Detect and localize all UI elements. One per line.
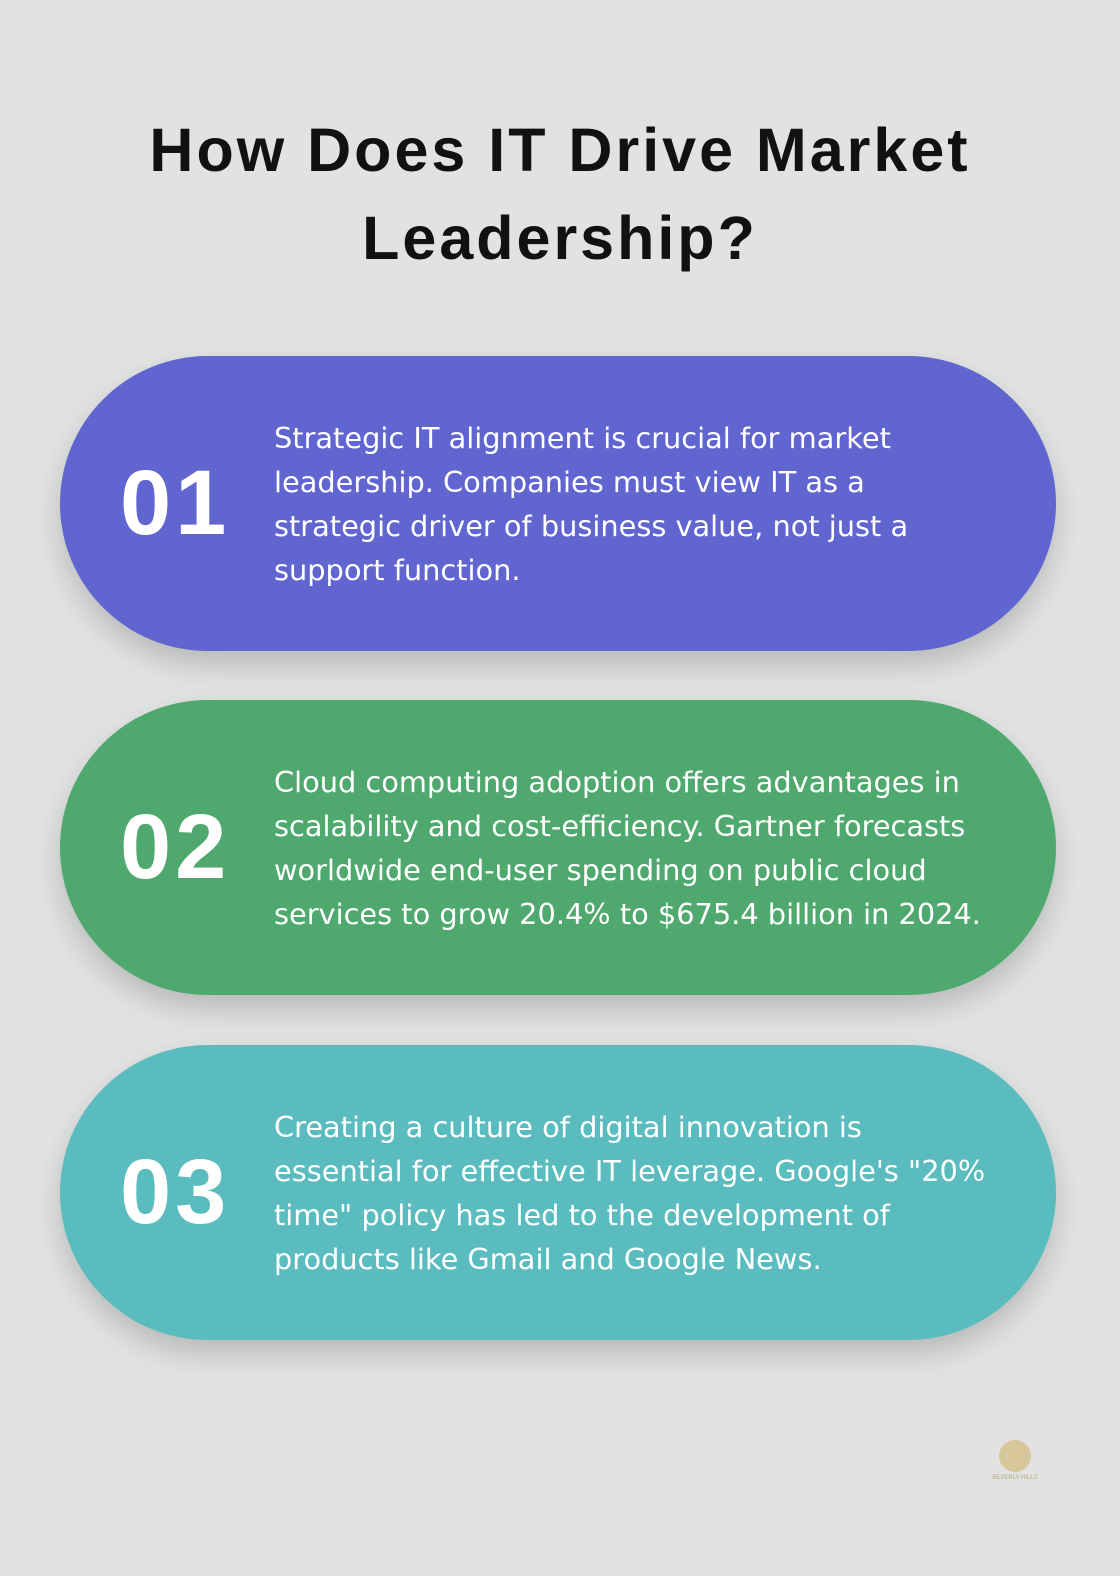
text 01: support function. — [274, 552, 521, 586]
text 03: essential for effective IT leverage. Google's "20% — [274, 1154, 985, 1188]
text 03: time" policy has led to the development of — [274, 1198, 890, 1232]
title — [149, 116, 971, 272]
text 01 — [274, 420, 908, 586]
text 02: Cloud computing adoption offers advantages in — [274, 764, 960, 798]
title: Leadership? — [362, 204, 758, 272]
panel: 03 — [60, 1045, 1056, 1340]
panel: 02 — [60, 700, 1056, 995]
text 02: services to grow 20.4% to $675.4 billion in 2024. — [274, 896, 981, 930]
text 01: Strategic IT alignment is crucial for market — [274, 420, 891, 454]
text 02: worldwide end-user spending on public cloud — [274, 852, 927, 886]
text 03: Creating a culture of digital innovation is — [274, 1110, 862, 1144]
text 03: products like Gmail and Google News. — [274, 1242, 822, 1276]
logo — [992, 1440, 1038, 1481]
logo: BEVERLY HILLS — [992, 1475, 1038, 1481]
number 03: 03 — [120, 1141, 230, 1243]
panel: 01 — [60, 356, 1056, 651]
number 01: 01 — [120, 452, 230, 554]
text 02 — [274, 764, 981, 930]
text 01: leadership. Companies must view IT as a — [274, 464, 865, 498]
text 02: scalability and cost-efficiency. Gartner forecasts — [274, 808, 965, 842]
text 01: strategic driver of business value, not just a — [274, 508, 908, 542]
title: How Does IT Drive Market — [149, 116, 971, 184]
number 02: 02 — [120, 796, 230, 898]
text 03 — [274, 1110, 985, 1276]
